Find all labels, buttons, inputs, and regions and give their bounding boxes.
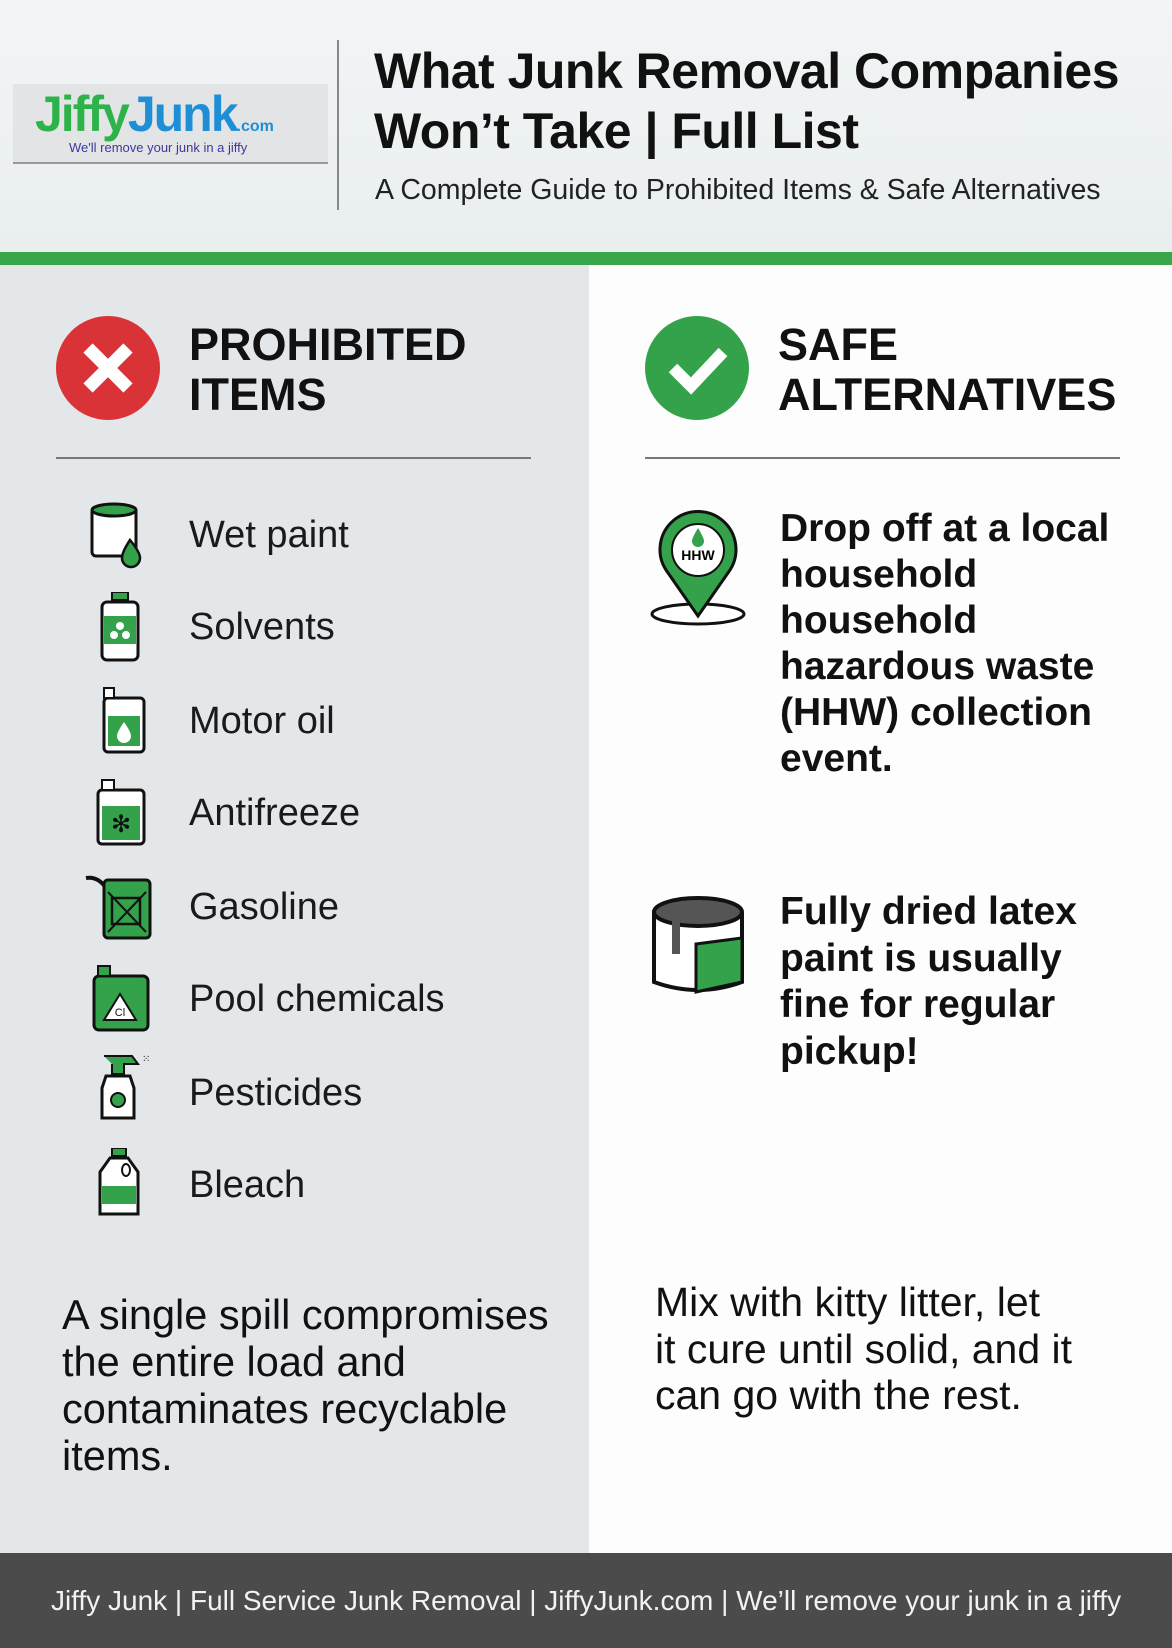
text: dried latex: Fully dried latex	[780, 890, 1077, 933]
text: spill note	[62, 1291, 549, 1479]
heading: prohibited items	[189, 319, 467, 420]
title: Won’t Take | Full List	[374, 103, 858, 159]
logo	[13, 84, 328, 164]
icon: pesticide sprayer: ⁙	[142, 1054, 150, 1065]
icon: red x	[56, 316, 160, 420]
panel: safe	[589, 265, 1172, 1553]
heading: safe alternatives: ALTERNATIVES	[778, 369, 1116, 420]
item: antifreeze: Antifreeze	[189, 792, 360, 834]
icon: antifreeze	[96, 779, 146, 846]
text: dried latex: fine for regular	[780, 983, 1055, 1026]
text: HHW alternative: household	[780, 553, 977, 596]
icon: gas can	[86, 876, 152, 940]
text: dried latex: paint is usually	[780, 936, 1062, 980]
text: HHW alternative: hazardous waste	[780, 645, 1094, 688]
icon: green check	[645, 316, 749, 420]
icon: dried paint can	[652, 896, 744, 994]
icon: bleach	[98, 1148, 140, 1216]
item: wet paint: Wet paint	[189, 514, 349, 556]
header background	[0, 0, 1172, 252]
text: dried latex	[780, 890, 1077, 1072]
icon: solvent bottle	[100, 592, 140, 662]
panel: prohibited	[0, 265, 589, 1553]
heading: prohibited items: ITEMS	[189, 369, 327, 420]
green bar	[0, 252, 1172, 265]
heading: safe alternatives: SAFE	[778, 319, 898, 370]
text: kitty litter	[655, 1279, 1072, 1418]
icon: HHW pin	[650, 510, 746, 626]
footer	[0, 1553, 1172, 1648]
text: spill note: items.	[62, 1432, 173, 1479]
text: HHW alternative: event.	[780, 737, 893, 780]
icon: pool chemicals: Cl	[115, 1007, 125, 1019]
item: bleach: Bleach	[189, 1164, 305, 1206]
item: pesticides: Pesticides	[189, 1072, 362, 1114]
subtitle: A Complete Guide to Prohibited Items & Safe Alternatives	[375, 174, 1101, 206]
item: motor oil: Motor oil	[189, 700, 335, 742]
text: kitty litter: Mix with kitty litter, let	[655, 1279, 1040, 1325]
logo: JiffyJunk.com	[35, 86, 274, 142]
title	[374, 43, 1119, 159]
heading: prohibited items: PROHIBITED	[189, 319, 467, 370]
text: HHW alternative: Drop off at a local	[780, 507, 1109, 550]
icon: HHW pin: HHW	[681, 547, 716, 563]
icon: pesticide sprayer	[100, 1054, 150, 1120]
text: HHW alternative	[780, 507, 1109, 780]
text: spill note: A single spill compromises	[62, 1291, 549, 1338]
text: dried latex: pickup!	[780, 1030, 919, 1072]
text: spill note: the entire load and	[62, 1338, 406, 1385]
icon: pool chemicals	[92, 965, 150, 1032]
title: What Junk Removal Companies	[374, 43, 1119, 99]
footer: Jiffy Junk | Full Service Junk Removal | JiffyJunk.com | We’ll remove your junk in a jiffy	[51, 1585, 1121, 1616]
icon: motor oil	[102, 687, 146, 754]
heading: safe alternatives	[778, 319, 1116, 420]
text: kitty litter: can go with the rest.	[655, 1372, 1022, 1418]
icon: antifreeze: ✻	[111, 811, 131, 838]
logo: We'll remove your junk in a jiffy	[69, 140, 247, 155]
text: HHW alternative: household	[780, 599, 977, 642]
item: solvents: Solvents	[189, 606, 335, 648]
item: gasoline: Gasoline	[189, 886, 339, 928]
text: kitty litter: it cure until solid, and it	[655, 1326, 1072, 1372]
item: pool chemicals: Pool chemicals	[189, 978, 445, 1020]
icon: paint can	[90, 502, 142, 568]
text: spill note: contaminates recyclable	[62, 1385, 507, 1432]
divider	[337, 40, 339, 210]
text: HHW alternative: (HHW) collection	[780, 691, 1092, 734]
